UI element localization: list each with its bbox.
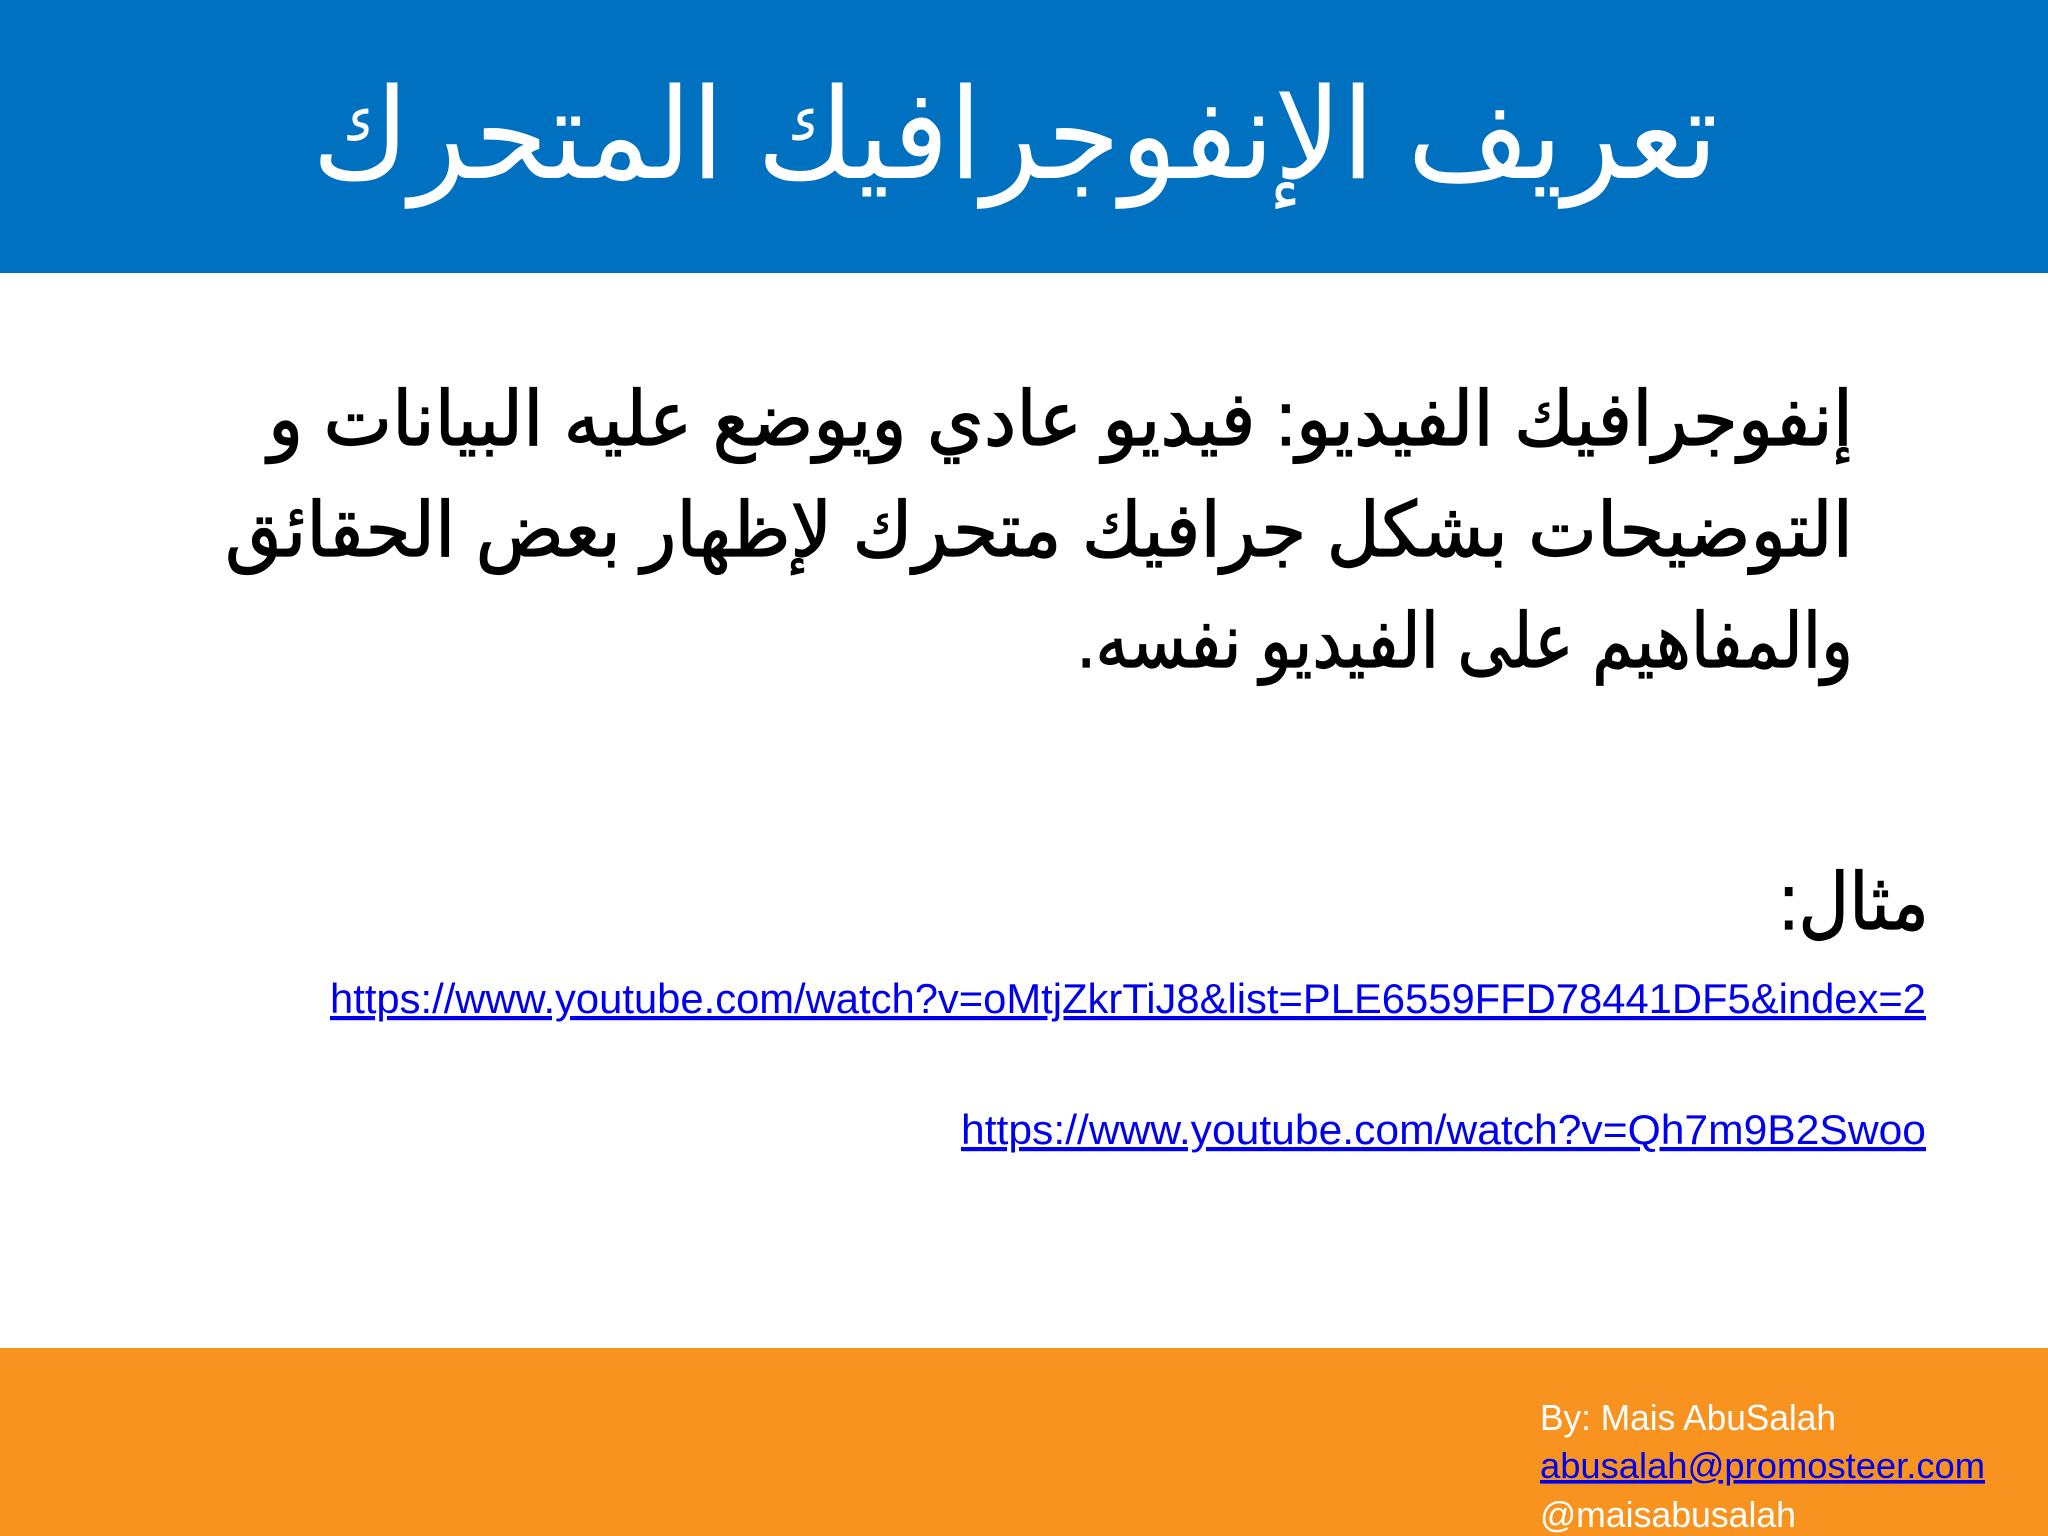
definition text block: التوضيحات بشكل جرافيك متحرك لإظهار بعض الحقائق bbox=[225, 488, 1853, 575]
author credits bbox=[1540, 1397, 1985, 1535]
example link 2: https://www.youtube.com/watch?v=Qh7m9B2Swoo bbox=[961, 1106, 1926, 1153]
definition text block bbox=[225, 377, 1853, 686]
title: تعريف الإنفوجرافيك المتحرك bbox=[312, 64, 1718, 209]
example label: مثال: bbox=[1779, 858, 1929, 946]
definition text block: إنفوجرافيك الفيديو: فيديو عادي ويوضع عليه البيانات و bbox=[264, 377, 1853, 464]
author credits: abusalah@promosteer.com bbox=[1540, 1445, 1985, 1486]
author credits: By: Mais AbuSalah bbox=[1540, 1397, 1836, 1438]
footer band bbox=[0, 1348, 2048, 1536]
header band bbox=[0, 0, 2048, 273]
definition text block: والمفاهيم على الفيديو نفسه. bbox=[1077, 599, 1853, 686]
author credits: @maisabusalah bbox=[1540, 1494, 1796, 1535]
example link 1: https://www.youtube.com/watch?v=oMtjZkrTiJ8&list=PLE6559FFD78441DF5&index=2 bbox=[330, 975, 1926, 1022]
